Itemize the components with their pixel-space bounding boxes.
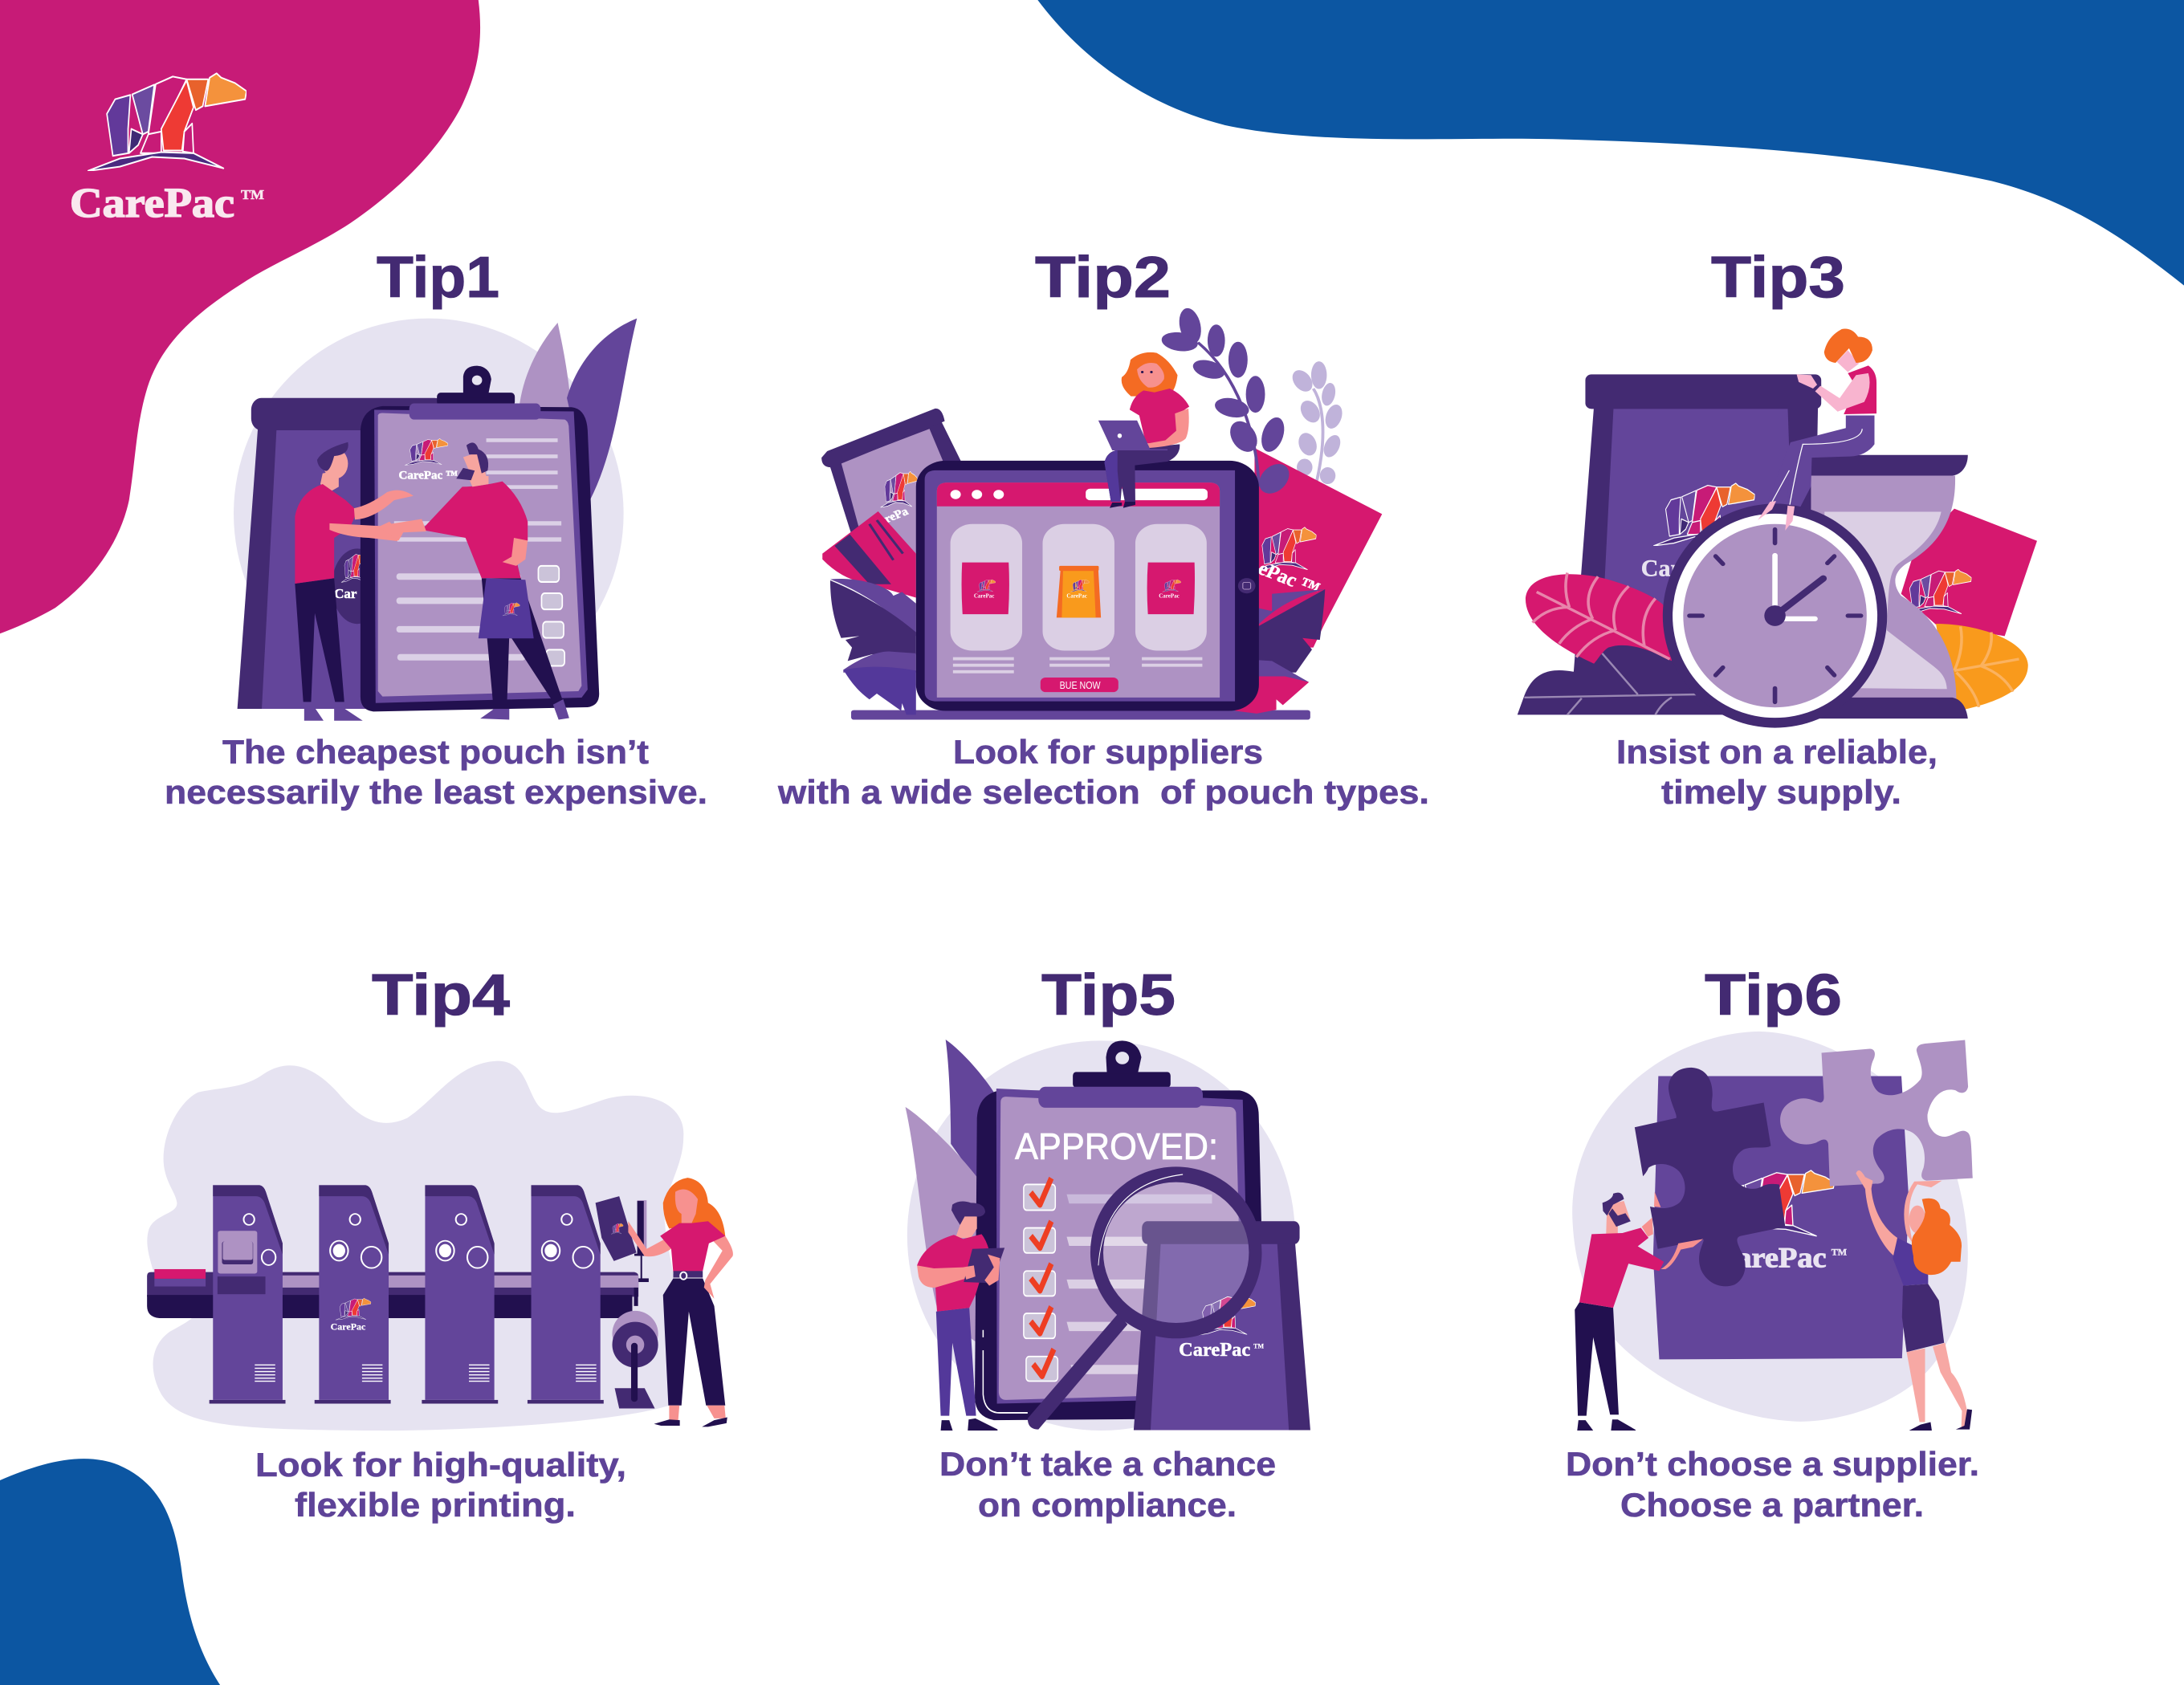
woman: [663, 1278, 725, 1406]
hourglass: [1811, 476, 1956, 699]
dark puzzle piece: [1635, 1068, 1785, 1286]
illustration: approved checklist with magnifier: CarePac: [1179, 1340, 1251, 1361]
heading: Tip2: Tip2: [1035, 246, 1171, 310]
pink pouch: [1901, 509, 2037, 636]
panel: tip 5: [906, 963, 1310, 1524]
illustration: online shop tablet with woman: CarePac: [974, 593, 994, 600]
illustration: online shop tablet with woman: BUE NOW: [1060, 679, 1101, 691]
caption tip 3: [1616, 733, 1937, 811]
caption tip 6: [1566, 1445, 1979, 1524]
caption tip 5: Don’t take a chance: [939, 1445, 1276, 1483]
illustration: puzzle pieces and partners: CarePac: [1714, 1242, 1827, 1274]
caption tip 1: necessarily the least expensive.: [165, 773, 707, 811]
label: APPROVED: APPROVED:: [1015, 1125, 1218, 1167]
illustration: printing press with woman: CarePac: [331, 1321, 366, 1333]
panel: tip 1: [165, 246, 707, 811]
caption tip 5: on compliance.: [978, 1486, 1237, 1524]
illustration: handshake in front of clipboard and pouch: Car: [334, 586, 357, 601]
bag: [479, 578, 534, 638]
panel: tip 3: [1518, 246, 2037, 811]
man: [936, 1308, 976, 1416]
caption tip 2: with a wide selection of pouch types.: [777, 773, 1429, 811]
caption tip 1: The cheapest pouch isn’t: [222, 733, 649, 771]
illustration: approved checklist with magnifier: [906, 1040, 1310, 1431]
orange leaf: [1936, 624, 2028, 712]
background blob: magenta top left: [0, 0, 480, 633]
logo: CarePac: [70, 73, 264, 226]
illustration: puzzle pieces and partners: [1572, 1032, 1973, 1431]
left man: [295, 578, 344, 702]
tablet: [916, 461, 1259, 711]
illustration: online shop tablet with woman: ePac ™: [1254, 558, 1323, 600]
man: [1575, 1302, 1619, 1416]
illustration: clock, hourglass and pouch: [1518, 329, 2037, 728]
conveyor: [147, 1272, 638, 1296]
magnifier: [1028, 1313, 1127, 1430]
background blob: blue top right: [1037, 0, 2184, 286]
pouch: [1134, 1242, 1310, 1431]
illustration: online shop tablet with woman: [821, 307, 1382, 720]
pink pouch: [1254, 448, 1382, 648]
held pouch: [596, 1196, 637, 1261]
caption tip 2: [777, 733, 1429, 811]
heading: Tip6: Tip6: [1705, 963, 1842, 1028]
heading: Tip4: Tip4: [372, 963, 510, 1028]
heading: Tip3: Tip3: [1711, 246, 1845, 310]
panel: tip 2: [777, 246, 1429, 811]
illustration: approved checklist with magnifier: TM: [1253, 1343, 1264, 1350]
pink leaf: [1526, 574, 1672, 664]
press units: [210, 1185, 286, 1404]
checkmarks: [1024, 1184, 1057, 1382]
light puzzle piece: [1780, 1040, 1973, 1186]
illustration: printing press with woman: [147, 1061, 733, 1431]
plants left and right: [851, 710, 1310, 720]
background blob: blue bottom left: [0, 1459, 220, 1685]
caption tip 6: Don’t choose a supplier.: [1566, 1445, 1979, 1483]
caption tip 6: Choose a partner.: [1620, 1486, 1924, 1524]
illustration: handshake in front of clipboard and pouch: [234, 319, 637, 721]
right man: [482, 578, 563, 705]
pole: [638, 1200, 646, 1255]
caption tip 1: [165, 733, 707, 811]
illustration: puzzle pieces and partners: TM: [1832, 1247, 1847, 1258]
heading: Tip5: Tip5: [1041, 963, 1176, 1028]
woman legs: [1768, 415, 1874, 514]
illustration: online shop tablet with woman: CarePac: [1066, 593, 1087, 600]
caption tip 4: [255, 1446, 626, 1524]
woman sitting: [1758, 501, 1795, 531]
illustration: online shop tablet with woman: rePa: [882, 505, 911, 526]
caption tip 5: [939, 1445, 1276, 1524]
woman: [1907, 1349, 1925, 1422]
caption tip 3: Insist on a reliable,: [1616, 733, 1937, 771]
roll: [613, 1311, 658, 1357]
heading: Tip1: Tip1: [377, 246, 499, 310]
card: [822, 511, 916, 598]
illustration: clock, hourglass and pouch: Car: [1641, 555, 1681, 581]
illustration: handshake in front of clipboard and pouch: CarePac ™: [399, 469, 458, 482]
logo: CarePac: TM: [241, 187, 264, 202]
panel: tip 4: [147, 963, 733, 1524]
caption tip 2: Look for suppliers: [953, 733, 1263, 771]
back pouch: [830, 421, 963, 536]
illustration: online shop tablet with woman: CarePac: [1159, 593, 1180, 600]
caption tip 4: flexible printing.: [295, 1486, 576, 1524]
branch: [1198, 343, 1259, 486]
logo: CarePac: CarePac: [70, 181, 234, 226]
pouch: [1653, 1076, 1909, 1359]
caption tip 4: Look for high-quality,: [255, 1446, 626, 1484]
caption tip 3: timely supply.: [1661, 773, 1901, 811]
woman with laptop: [1104, 444, 1180, 502]
panel: tip 6: [1566, 963, 1979, 1524]
clock: [1663, 503, 1887, 728]
dark leaf ground: [1518, 647, 1739, 714]
